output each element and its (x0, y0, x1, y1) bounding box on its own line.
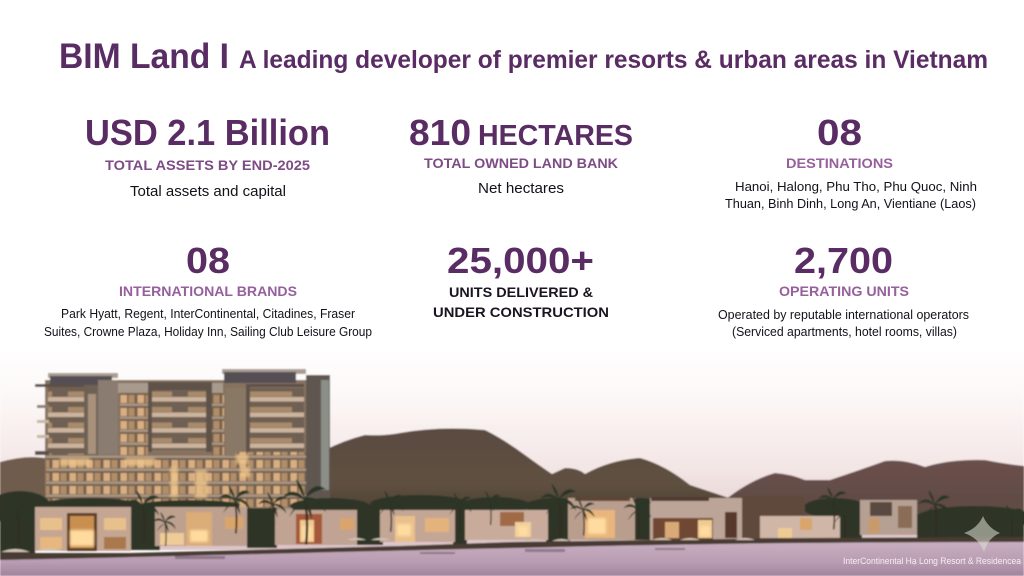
beach umbrellas (1, 538, 755, 552)
stat: destinations: DESTINATIONS (786, 155, 893, 171)
building window glows (60, 454, 250, 498)
beach (0, 542, 1024, 576)
stat: international brands: 08 (186, 240, 230, 281)
mountains (0, 429, 1024, 520)
stat: land bank: Net hectares (478, 180, 564, 197)
stat: land bank: TOTAL OWNED LAND BANK (424, 155, 618, 171)
stat: destinations: Thuan, Binh Dinh, Long An, Vientiane (Laos) (725, 196, 976, 211)
shoreline hedge (0, 537, 1024, 562)
stat: land bank: 810 (409, 112, 471, 153)
warm window glows (70, 518, 710, 546)
title: A leading developer of premier resorts & urban areas in Vietnam (239, 46, 988, 74)
title (59, 37, 988, 76)
stat: total assets: TOTAL ASSETS BY END-2025 (105, 157, 310, 173)
photo: InterContinental Ha Long resort scene (0, 345, 1024, 576)
stat: destinations (725, 112, 977, 211)
villas (35, 496, 917, 551)
stat: international brands: Park Hyatt, Regent, InterContinental, Citadines, Fraser (61, 306, 356, 321)
beach shadows (175, 548, 685, 559)
stat: units delivered: UNDER CONSTRUCTION (433, 304, 609, 320)
stat: units delivered (433, 240, 609, 320)
icon: four-point star watermark (964, 516, 1000, 552)
stat: total assets: Total assets and capital (130, 183, 286, 200)
stat: units delivered: 25,000+ (447, 240, 594, 281)
sky (0, 345, 1024, 550)
stat: international brands (44, 240, 372, 339)
palm trees (0, 479, 1023, 546)
stat: destinations: 08 (817, 112, 862, 153)
title: BIM Land I (59, 37, 229, 76)
stat: operating units (718, 240, 969, 339)
stat: international brands: INTERNATIONAL BRANDS (119, 283, 297, 299)
stat: operating units: 2,700 (794, 240, 893, 281)
stat: destinations: Hanoi, Halong, Phu Tho, Phu Quoc, Ninh (735, 179, 977, 194)
stat: international brands: Suites, Crowne Plaza, Holiday Inn, Sailing Club Leisure Group (44, 324, 372, 339)
tree line (0, 491, 1024, 555)
stat: operating units: Operated by reputable international operators (718, 307, 969, 322)
stat: total assets (85, 112, 330, 200)
stat: land bank (409, 112, 633, 197)
stat: units delivered: UNITS DELIVERED & (449, 284, 593, 300)
stat: total assets: USD 2.1 Billion (85, 112, 330, 153)
stat: operating units: (Serviced apartments, hotel rooms, villas) (732, 324, 957, 339)
stat: land bank: HECTARES (478, 120, 633, 152)
high-rise building (35, 369, 330, 510)
stat: operating units: OPERATING UNITS (779, 283, 909, 299)
